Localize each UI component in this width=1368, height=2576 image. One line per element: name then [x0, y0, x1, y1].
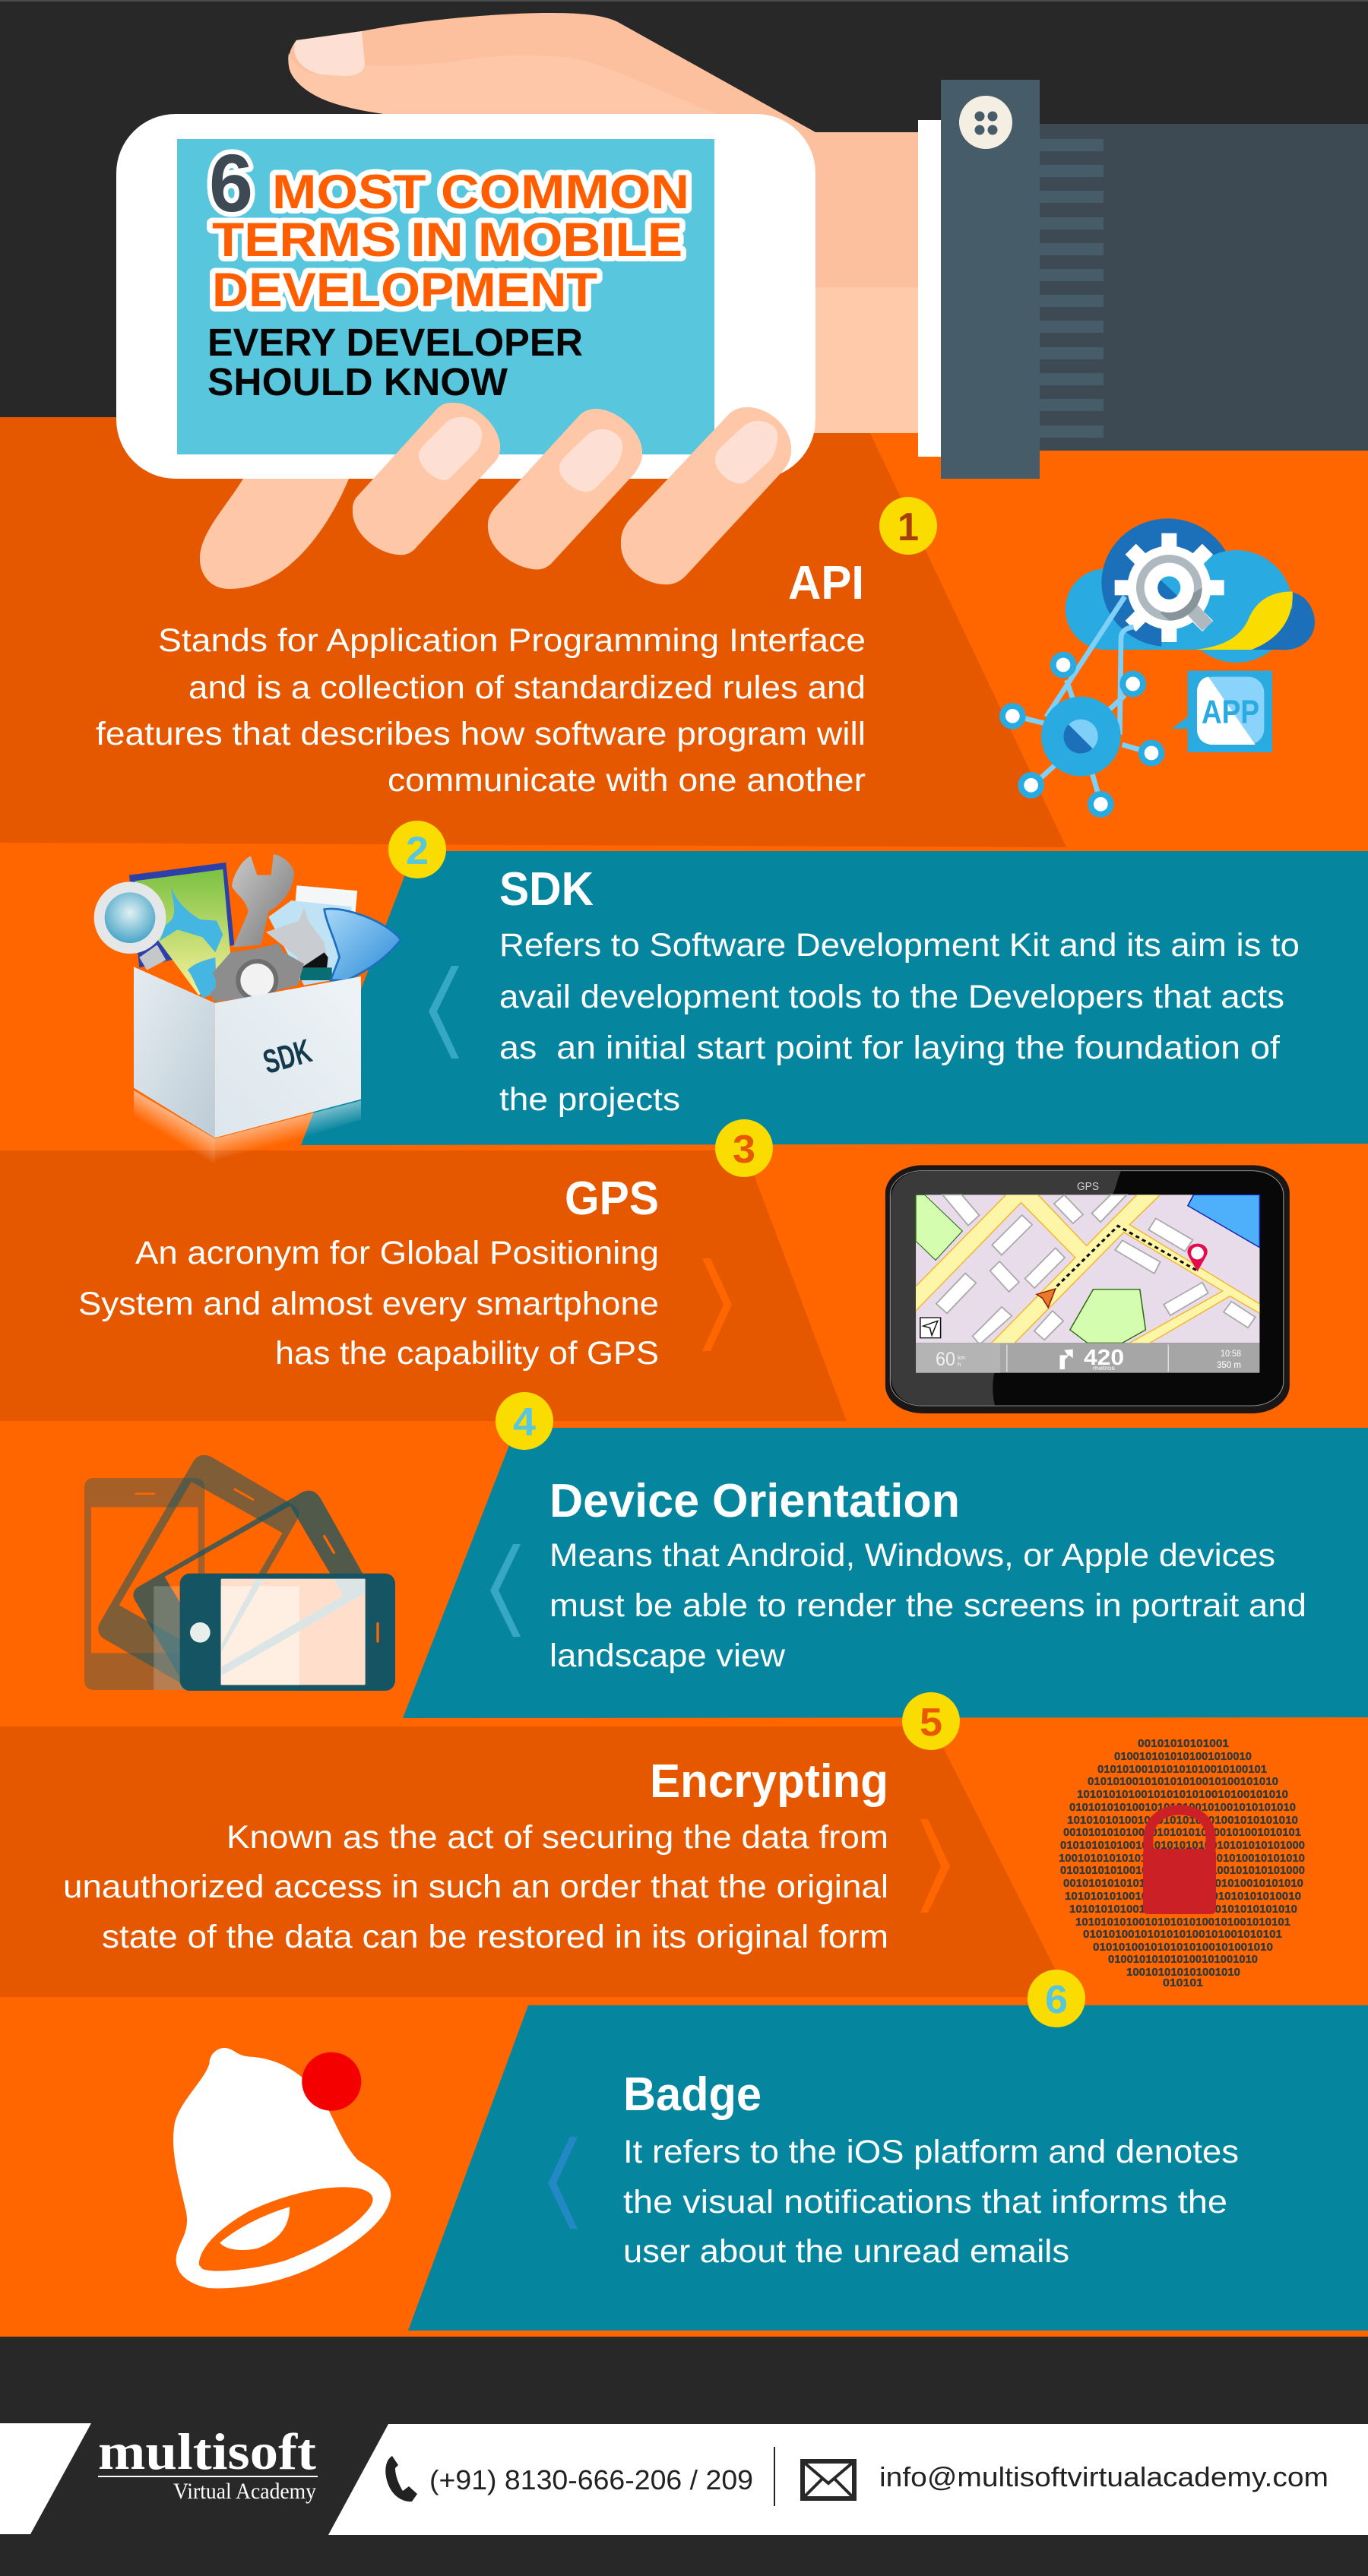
- icon: binary circle with padlock: [1059, 1737, 1305, 1989]
- icon: binary circle with padlock: 0100101010101001010010: [1114, 1750, 1252, 1763]
- panel text: SDK: avail development tools to the Developers that acts: [499, 979, 1284, 1015]
- phone number: (+91) 8130-666-206 / 209: [429, 2464, 753, 2495]
- panel text: Badge: the visual notifications that informs the: [623, 2184, 1227, 2220]
- icon: SDK box: [94, 854, 401, 1165]
- icon: binary circle with padlock: 100101010101001010: [1126, 1966, 1240, 1979]
- icon: binary circle with padlock: 100101010101010101010101001010010101010: [1059, 1852, 1305, 1865]
- panel: Device Orientation background: [403, 1428, 1368, 1718]
- icon: GPS navigator: 60: [936, 1349, 955, 1370]
- icon: GPS navigator: h: [958, 1361, 961, 1368]
- panel: SDK background: [301, 851, 1368, 1145]
- logo: [98, 2423, 318, 2504]
- icon: binary circle with padlock: 010101010100101010100101001010101010: [1069, 1801, 1296, 1814]
- chevron: SDK: [429, 966, 459, 1059]
- illustration: phone body: [116, 114, 815, 479]
- icon: binary circle with padlock: 010101010100101010101010010101010101000: [1060, 1839, 1305, 1852]
- email: info@multisoftvirtualacademy.com: [879, 2461, 1328, 2492]
- icon: envelope: [803, 2461, 854, 2498]
- panel text: SDK: [499, 863, 1300, 1118]
- badge 3: 3: [733, 1128, 755, 1172]
- badge 3: [715, 1119, 773, 1177]
- footer: [0, 2423, 1368, 2535]
- gear: [1115, 533, 1224, 642]
- chevron: Encrypting: [920, 1819, 950, 1913]
- icon: binary circle with padlock: 010010101010100101001010: [1108, 1953, 1258, 1966]
- panel text: SDK: Refers to Software Development Kit and its aim is to: [499, 927, 1300, 964]
- title: TERMS IN MOBILE: [212, 214, 682, 267]
- icon: binary circle with padlock: 00101010101001: [1138, 1737, 1229, 1750]
- panel text: API: and is a collection of standardized rules and: [188, 669, 866, 706]
- panel text: SDK: as an initial start point for laying the foundation of: [499, 1030, 1281, 1066]
- panel text: Device Orientation: must be able to render the screens in portrait and: [549, 1587, 1306, 1624]
- title: SHOULD KNOW: [207, 360, 508, 403]
- panel: Badge background: [408, 2005, 1368, 2331]
- panel text: Encrypting: Known as the act of securing the data from: [226, 1819, 888, 1856]
- logo: multisoft: [98, 2423, 316, 2480]
- title: [207, 137, 689, 403]
- title: MOST COMMON: [272, 166, 689, 219]
- icon: cloud API network: [1002, 518, 1315, 815]
- chevron: Device Orientation: [490, 1544, 521, 1637]
- badge 1: [879, 497, 937, 555]
- panel text: Badge: user about the unread emails: [623, 2233, 1069, 2270]
- illustration: wrist and thumb: [288, 13, 918, 433]
- panel text: GPS: has the capability of GPS: [275, 1335, 659, 1372]
- icon: binary circle with padlock: 1010101010010101010101001010101010010: [1065, 1890, 1301, 1903]
- app bubble: [1188, 671, 1272, 752]
- panel text: Device Orientation: landscape view: [549, 1638, 786, 1674]
- panel text: GPS: An acronym for Global Positioning: [135, 1235, 659, 1271]
- badge 6: 6: [1045, 1978, 1068, 2022]
- panel: API background: [0, 417, 1066, 847]
- icon: binary circle with padlock: 0101010010101010100101001010101: [1083, 1928, 1282, 1941]
- chevron: Badge: [548, 2137, 578, 2229]
- title: 6: [209, 137, 253, 229]
- logo: Virtual Academy: [173, 2479, 316, 2504]
- panel text: Device Orientation: [549, 1475, 1306, 1674]
- panel text: Badge: [623, 2068, 1239, 2270]
- icon: binary circle with padlock: 0101010010101010100101001010: [1093, 1941, 1273, 1954]
- illustration: back finger: [200, 471, 350, 589]
- icon: binary circle with padlock: 1010101010010101010100101001010101: [1075, 1916, 1290, 1929]
- panel text: Encrypting: Encrypting: [650, 1755, 888, 1808]
- panel text: API: communicate with one another: [388, 762, 866, 799]
- badge 4: [496, 1392, 553, 1450]
- illustration: three front fingers: [353, 403, 791, 584]
- chevron: GPS: [702, 1258, 732, 1351]
- panel text: Device Orientation: Means that Android, Windows, or Apple devices: [549, 1537, 1275, 1574]
- panel: Encrypting background: [0, 1726, 1069, 1997]
- title: DEVELOPMENT: [212, 264, 597, 317]
- icon: SDK box: SDK: [259, 1032, 315, 1081]
- panel text: Encrypting: state of the data can be restored in its original form: [102, 1919, 888, 1955]
- icon: GPS navigator: 10:58: [1221, 1350, 1241, 1359]
- panel text: API: features that describes how software program will: [96, 716, 866, 752]
- icon: GPS navigator: 350 m: [1217, 1361, 1241, 1370]
- panel text: GPS: [78, 1172, 659, 1372]
- panel text: Encrypting: unauthorized access in such an order that the original: [63, 1869, 888, 1905]
- phone screen: [177, 139, 714, 454]
- icon: GPS navigator: km: [958, 1354, 965, 1361]
- icon: telephone: [385, 2456, 417, 2502]
- badge 1: 1: [898, 505, 919, 549]
- panel text: API: API: [788, 557, 864, 609]
- panel text: API: Stands for Application Programming Interface: [158, 622, 866, 659]
- icon: binary circle with padlock: 00101010101001010101010100101001010101: [1063, 1826, 1301, 1839]
- badge 5: 5: [920, 1701, 942, 1745]
- icon: binary circle with padlock: 010101: [1163, 1976, 1203, 1989]
- icon: binary circle with padlock: 010101001010101010010100101: [1097, 1763, 1267, 1776]
- panel text: Encrypting: [63, 1755, 888, 1955]
- icon: binary circle with padlock: 101010101001010101010101001010101010: [1067, 1814, 1298, 1827]
- panel text: SDK: the projects: [499, 1081, 680, 1118]
- badge 4: 4: [513, 1400, 536, 1445]
- icon: notification bell: [173, 2048, 391, 2288]
- illustration: sleeve and cuff: [918, 80, 1368, 479]
- panel: GPS background: [0, 1150, 847, 1421]
- icon: cloud API network: APP: [1202, 695, 1259, 731]
- panel text: GPS: System and almost every smartphone: [78, 1286, 659, 1322]
- panel text: SDK: SDK: [499, 863, 594, 916]
- icon: GPS navigator: 420: [1084, 1346, 1124, 1370]
- icon: binary circle with padlock: 101010101001010101010010100101010: [1077, 1788, 1288, 1801]
- panel text: Badge: It refers to the iOS platform and denotes: [623, 2134, 1239, 2170]
- icon: binary circle with padlock: 00101010101010101010101001010010101010: [1063, 1877, 1303, 1890]
- icon: rotating phones: [84, 1455, 395, 1691]
- map: [916, 1195, 1259, 1343]
- panel text: API: [96, 557, 866, 799]
- panel text: GPS: GPS: [565, 1172, 659, 1225]
- badge 5: [902, 1692, 960, 1750]
- panel text: Badge: Badge: [623, 2068, 762, 2121]
- network connectors: [1024, 597, 1140, 794]
- badge 2: 2: [406, 829, 429, 873]
- status bar: [916, 1343, 1259, 1373]
- icon: GPS navigator: GPS: [1077, 1180, 1099, 1193]
- badge 6: [1028, 1970, 1085, 2027]
- icon: binary circle with padlock: 010101001010101010010100101010: [1088, 1775, 1278, 1788]
- icon: GPS navigator: [885, 1165, 1290, 1413]
- panel text: Device Orientation: Device Orientation: [549, 1475, 960, 1527]
- badge 2: [388, 821, 446, 878]
- icon: binary circle with padlock: 101010101001010101010100101010101010: [1069, 1903, 1297, 1916]
- title: EVERY DEVELOPER: [207, 321, 583, 364]
- icon: binary circle with padlock: 010101010100101010101010100101010101000: [1060, 1864, 1305, 1877]
- icon: GPS navigator: metros: [1093, 1364, 1115, 1372]
